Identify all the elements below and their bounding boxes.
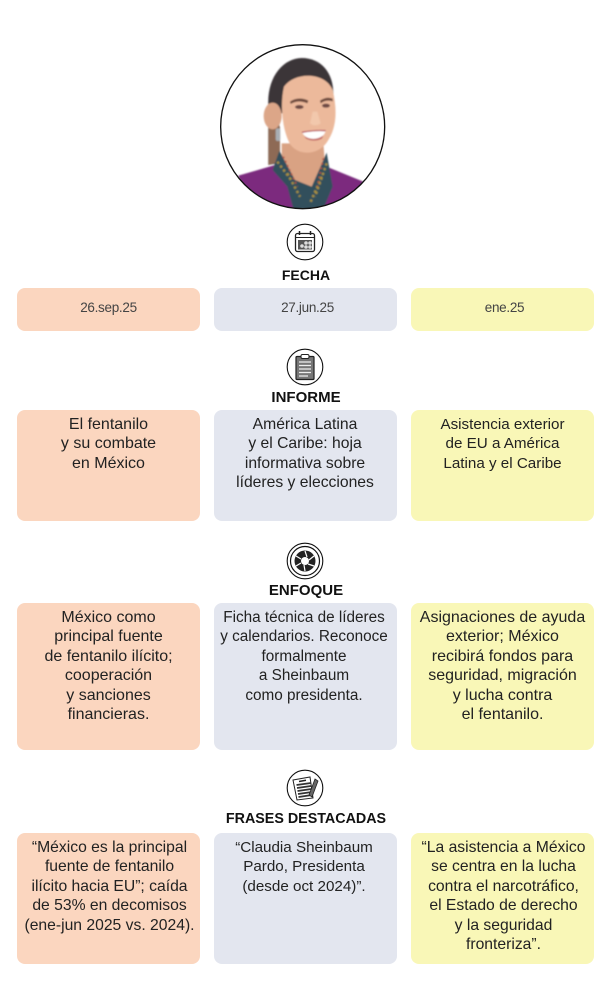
- date card: 27.jun.25: 27.jun.25: [281, 300, 334, 315]
- card: frases 1: (ene-jun 2025 vs. 2024).: [24, 917, 195, 934]
- portrait photo: [220, 44, 386, 210]
- card: informe 1: [17, 410, 200, 521]
- card: frases 2: [214, 833, 397, 964]
- card: enfoque 2: a Sheinbaum: [259, 667, 349, 684]
- card: enfoque 3: recibirá fondos para: [432, 648, 573, 665]
- card: informe 2: [214, 410, 397, 521]
- heading: FECHA: FECHA: [282, 267, 330, 283]
- card: frases 1: [17, 833, 200, 964]
- date card: 27.jun.25: [214, 288, 397, 331]
- card: enfoque 3: el fentanilo.: [462, 706, 543, 723]
- card: frases 1: fuente de fentanilo: [45, 858, 174, 875]
- heading: INFORME: INFORME: [271, 389, 341, 406]
- card: frases 3: y la seguridad: [455, 917, 552, 934]
- card: enfoque 2: Ficha técnica de líderes: [223, 609, 385, 626]
- card: informe 1: y su combate: [61, 435, 156, 452]
- date card: 26.sep.25: 26.sep.25: [80, 300, 137, 315]
- icon: clipboard: [286, 348, 324, 386]
- card: informe 3: Asistencia exterior: [440, 416, 565, 433]
- card: frases 3: el Estado de derecho: [429, 897, 578, 914]
- heading: FRASES DESTACADAS: FRASES DESTACADAS: [226, 811, 386, 827]
- card: enfoque 1: México como: [61, 609, 156, 626]
- icon: calendar: [286, 224, 324, 260]
- card: enfoque 3: seguridad, migración: [428, 667, 577, 684]
- card: enfoque 3: Asignaciones de ayuda: [420, 609, 585, 626]
- card: enfoque 2: [214, 603, 397, 750]
- card: informe 2: y el Caribe: hoja: [248, 435, 362, 452]
- card: enfoque 1: y sanciones: [66, 687, 151, 704]
- date card: 26.sep.25: [17, 288, 200, 331]
- card: enfoque 1: [17, 603, 200, 750]
- card: informe 1: en México: [72, 455, 145, 472]
- card: frases 2: (desde oct 2024)”.: [242, 878, 366, 895]
- card: frases 1: de 53% en decomisos: [32, 897, 187, 914]
- card: frases 2: “Claudia Sheinbaum: [235, 839, 373, 856]
- date card: ene.25: [411, 288, 594, 331]
- card: frases 1: ilícito hacia EU”; caída: [31, 878, 188, 895]
- heading: ENFOQUE: ENFOQUE: [269, 582, 343, 599]
- icon: document and pencil: [286, 770, 324, 806]
- card: informe 2: América Latina: [253, 416, 357, 433]
- card: informe 1: El fentanilo: [69, 416, 148, 433]
- card: informe 3: Latina y el Caribe: [443, 455, 562, 472]
- card: frases 3: se centra en la lucha: [431, 858, 576, 875]
- card: enfoque 3: exterior; México: [446, 628, 559, 645]
- card: enfoque 3: y lucha contra: [453, 687, 552, 704]
- card: informe 3: de EU a América: [446, 435, 559, 452]
- card: frases 3: contra el narcotráfico,: [428, 878, 579, 895]
- card: frases 1: “México es la principal: [32, 839, 187, 856]
- card: frases 3: fronteriza”.: [466, 936, 541, 953]
- card: enfoque 2: y calendarios. Reconoce: [220, 628, 388, 645]
- card: enfoque 1: de fentanilo ilícito;: [44, 648, 173, 665]
- card: informe 2: líderes y elecciones: [236, 474, 374, 491]
- card: informe 2: informativa sobre: [245, 455, 365, 472]
- date card: ene.25: ene.25: [485, 300, 524, 315]
- card: enfoque 3: [411, 603, 594, 750]
- card: enfoque 2: formalmente: [261, 648, 346, 665]
- icon: camera aperture: [286, 542, 324, 580]
- card: frases 2: Pardo, Presidenta: [243, 858, 365, 875]
- card: enfoque 2: como presidenta.: [245, 687, 363, 704]
- card: enfoque 1: cooperación: [65, 667, 152, 684]
- card: frases 3: “La asistencia a México: [422, 839, 585, 856]
- card: frases 3: [411, 833, 594, 964]
- card: enfoque 1: financieras.: [68, 706, 149, 723]
- card: informe 3: [411, 410, 594, 521]
- card: enfoque 1: principal fuente: [54, 628, 163, 645]
